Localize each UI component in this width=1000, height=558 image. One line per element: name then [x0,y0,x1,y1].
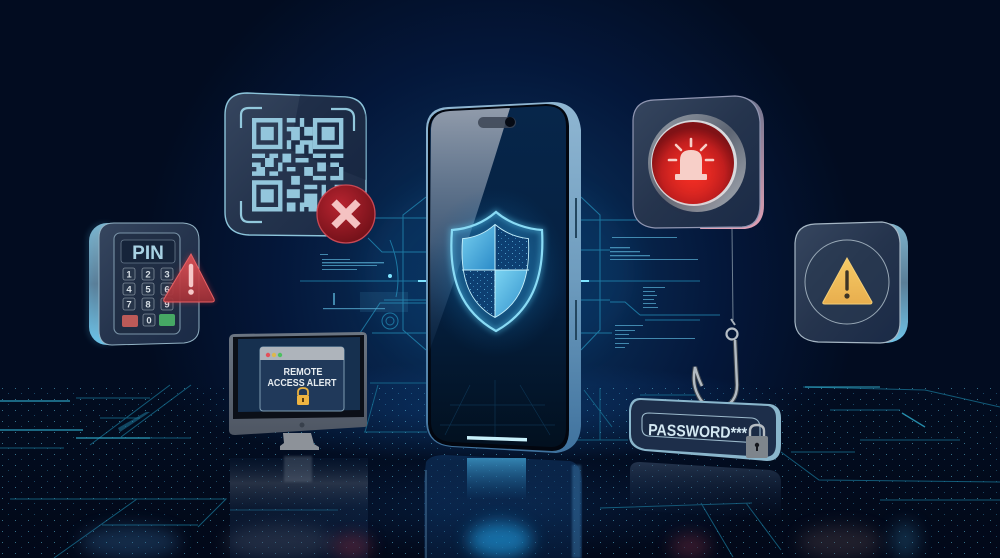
phone body [426,102,581,453]
keypad card edge [89,223,149,345]
number keys: 6 [164,284,170,296]
keypad frame [114,233,180,334]
alert window: ACCESS ALERT [268,378,336,389]
keypad glass card [99,223,199,345]
red X badge [317,185,375,243]
tag body [629,398,781,461]
scanner corners [241,108,354,222]
screen floor lines [440,380,555,440]
alarm card edge [700,97,764,229]
number keys: 5 [145,284,151,296]
password field [642,413,760,443]
cancel and confirm keys [122,314,175,327]
warning glass card [795,222,900,343]
card: PIN keypad [89,223,215,345]
number keys: 8 [145,300,151,310]
number keys: 3 [164,270,170,280]
phone [424,102,581,453]
number keys: 9 [164,300,170,310]
warning card edge [860,223,908,343]
code snippets left [320,254,408,312]
number keys: 2 [145,270,151,280]
gold lock [297,388,309,405]
number keys [123,268,173,326]
QR glass card [225,93,366,236]
password text: PASSWORD*** [648,422,748,442]
password tag [629,398,781,461]
alarm button [648,114,746,212]
amber triangle [823,258,872,304]
number keys: 1 [126,270,132,280]
red warning triangle [163,253,215,302]
side buttons [575,198,577,340]
alarm glass card [633,96,760,228]
PIN display: PIN [132,243,164,264]
monitor stand [280,433,319,450]
card: red alarm button [633,96,764,229]
QR pattern [252,118,343,211]
warning circle [805,240,889,324]
padlock [746,425,768,458]
shield icon [441,202,556,344]
card: yellow warning [795,222,908,343]
floor reflections [80,455,919,558]
number keys: 7 [126,300,132,310]
monitor screen [233,335,364,419]
phone bezel [428,104,569,451]
home bar [467,436,527,442]
hud circuitry around phone [300,177,720,367]
dynamic island [478,117,516,128]
number keys: 0 [146,316,152,326]
screen glare [429,108,510,352]
phone screen [430,106,566,447]
code snippets right [610,237,698,348]
alert window: REMOTE [284,367,323,378]
monitor body [229,332,367,435]
fishing line and hook [694,229,738,408]
camera dot [300,422,304,428]
siren icon [669,139,713,180]
monitor: remote access alert [229,332,367,450]
number keys: 4 [126,284,132,296]
floor circuit grid [0,383,1000,558]
card: malicious QR code [225,93,375,243]
alert window [260,347,344,411]
